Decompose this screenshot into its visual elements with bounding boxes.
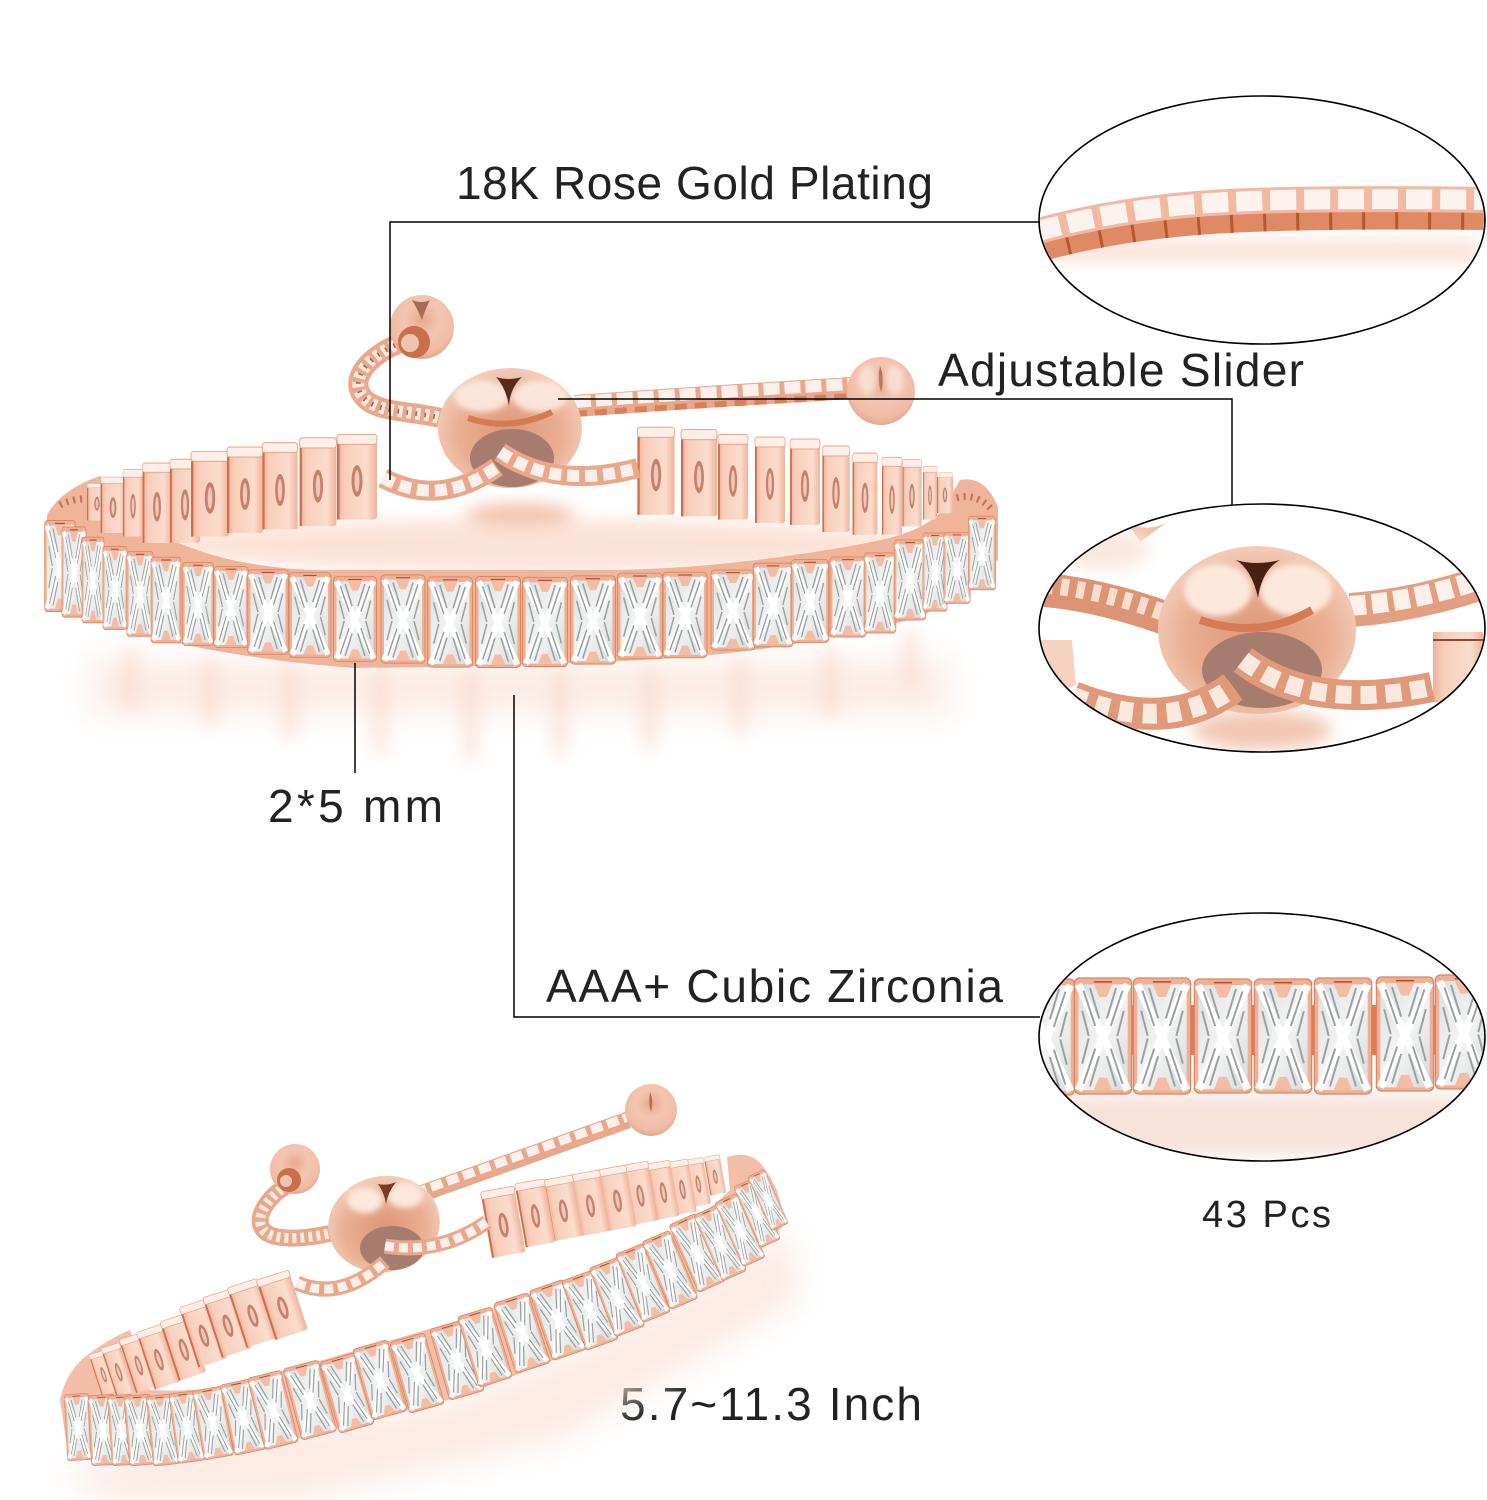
ball: right (625, 1084, 677, 1136)
chain to left ball (260, 1185, 332, 1238)
slider shadow (465, 503, 575, 527)
chain through slider (297, 1222, 487, 1289)
label: AAA+ Cubic Zirconia: AAA+ Cubic Zirconia (546, 960, 1003, 1012)
rose rim with end caps (47, 476, 998, 668)
slider bead (321, 1167, 447, 1281)
back links, right group (637, 427, 953, 535)
detail ellipse: chain (1035, 96, 1487, 344)
label: 43 Pcs: 43 Pcs (1202, 1194, 1331, 1236)
back links, right group (480, 1155, 726, 1258)
chain through slider (383, 452, 638, 491)
detail ellipse: slider (1039, 504, 1487, 752)
front stones (45, 516, 996, 668)
callout lines (355, 222, 1232, 1017)
label: 5.7~11.3 Inch: 5.7~11.3 Inch (620, 1378, 922, 1430)
label: Adjustable Slider: Adjustable Slider (938, 344, 1304, 396)
back links, left group (87, 434, 377, 543)
ball: left (270, 1144, 320, 1194)
ball: right (847, 357, 915, 425)
chain to left ball (358, 340, 440, 418)
label: 18K Rose Gold Plating: 18K Rose Gold Plating (456, 157, 933, 209)
reflection below small bracelet (60, 1230, 800, 1500)
rose rim with end caps (60, 1155, 782, 1463)
reflection below main bracelet (90, 630, 950, 760)
chain to right ball (575, 384, 852, 414)
label: 2*5 mm: 2*5 mm (268, 780, 443, 832)
front stones (64, 1169, 788, 1466)
rim ridges (60, 497, 992, 510)
ball: left (390, 295, 454, 359)
inner glow of main bracelet (160, 519, 920, 571)
detail ellipse: stones (1017, 913, 1487, 1161)
chain to right ball (415, 1117, 628, 1196)
back links, left group (89, 1270, 308, 1398)
small bracelet (60, 1084, 800, 1500)
slider bead (438, 368, 582, 488)
main bracelet (45, 295, 998, 760)
